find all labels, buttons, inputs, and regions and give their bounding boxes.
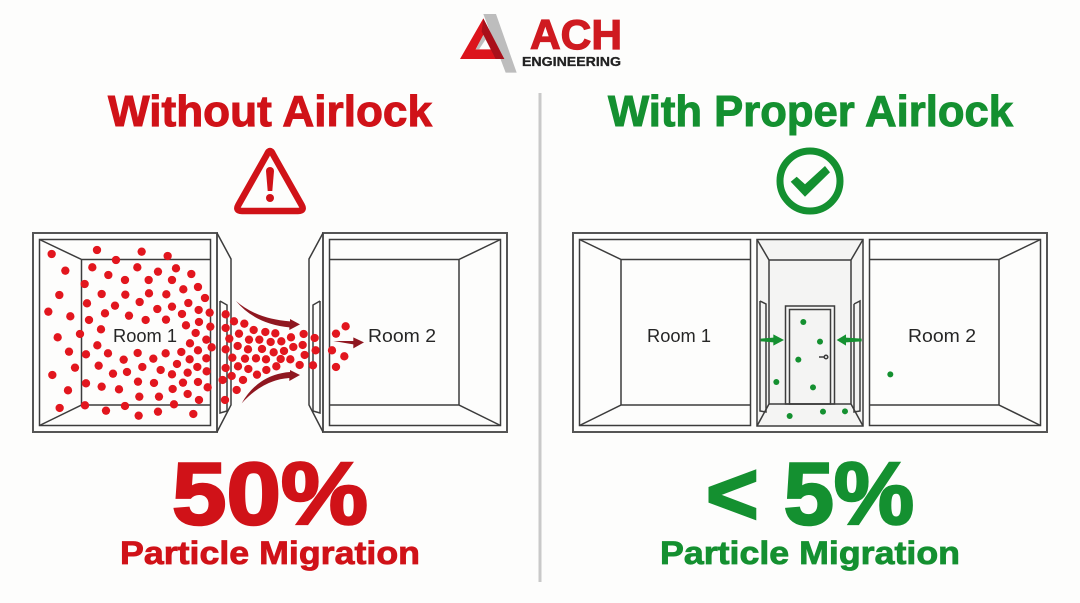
heading: with proper airlock: With Proper Airlock <box>608 87 1014 136</box>
green particles <box>773 319 893 419</box>
label: room 2: Room 2 <box>368 326 436 346</box>
stat: 50%: 50% <box>172 444 368 543</box>
label: room 1: Room 1 <box>647 326 711 346</box>
room 2 shell <box>870 240 1040 426</box>
logo wordmark: ACH <box>530 11 622 58</box>
red particles in room 1 <box>44 246 216 420</box>
logo <box>460 11 622 73</box>
diagram: with proper airlock <box>573 233 1047 432</box>
label: room 2: Room 2 <box>908 326 976 346</box>
heading: without airlock: Without Airlock <box>108 87 433 136</box>
label: room 1: Room 1 <box>113 326 177 346</box>
stat: under 5%: < 5% <box>706 444 914 543</box>
logo subtitle: ENGINEERING <box>522 54 621 69</box>
caption: particle migration, with airlock: Particle Migration <box>660 535 960 571</box>
caption: particle migration, without airlock: Particle Migration <box>120 535 420 571</box>
divider <box>538 93 542 582</box>
room 2 shell <box>309 233 507 432</box>
room 1 shell <box>33 233 231 432</box>
arrows: inward pressure <box>761 334 862 346</box>
diagram: without airlock <box>33 233 507 432</box>
arrows: particle flow <box>236 301 364 403</box>
airlock door <box>786 306 834 404</box>
icon: check circle <box>780 151 840 211</box>
room 1 shell <box>580 240 750 426</box>
airlock chamber <box>757 240 863 426</box>
icon: warning triangle <box>237 151 303 211</box>
red particles in the leak stream <box>218 310 350 404</box>
icon: logo mark <box>460 14 517 73</box>
outer shell <box>573 233 1047 432</box>
